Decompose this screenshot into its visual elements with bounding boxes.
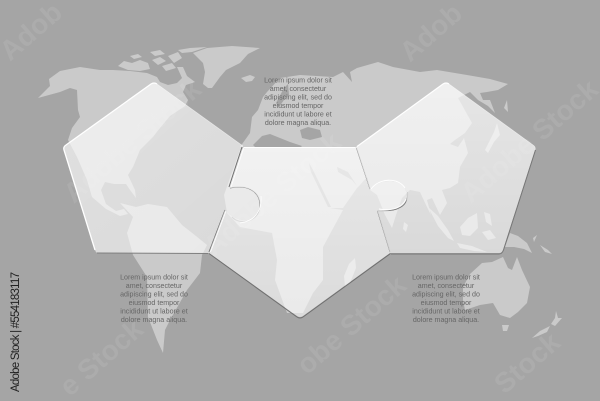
text block: bottom right (412, 274, 480, 324)
text block: top: amet, consectetur (270, 85, 327, 93)
australia (463, 257, 530, 318)
text block: bottom right: eiusmod tempor (421, 299, 472, 307)
puzzle piece: centre pentagon (209, 147, 408, 318)
south america (120, 203, 207, 357)
southeast asia islands (403, 207, 496, 252)
text block: top (264, 76, 332, 127)
text block: bottom right: dolore magna aliqua. (413, 316, 479, 324)
text block: bottom right: Lorem ipsum dolor sit (412, 274, 480, 282)
text block: bottom left: eiusmod tempor (129, 299, 180, 307)
watermark: Adobe Stock (454, 73, 600, 209)
watermark: e Stock (53, 313, 149, 401)
text block: bottom left: amet, consectetur (126, 282, 183, 290)
text block: bottom left: dolore magna aliqua. (121, 316, 187, 324)
puzzle piece: right pentagon (356, 83, 536, 254)
text block: bottom left: incididunt ut labore et (120, 308, 188, 316)
madagascar (344, 258, 356, 287)
text block: top: incididunt ut labore et (264, 110, 332, 118)
japan and sakhalin (485, 100, 508, 153)
text block: bottom right: incididunt ut labore et (412, 308, 480, 316)
africa (224, 143, 343, 313)
world map (38, 46, 562, 357)
tasmania (502, 325, 509, 331)
watermark: Adobe Stock (57, 73, 207, 209)
text block: top: adipiscing elit, sed do (264, 94, 332, 102)
watermark: obe Stock (291, 269, 412, 380)
seas (253, 84, 357, 207)
puzzle piece: left pentagon (64, 83, 261, 254)
iceland (241, 75, 255, 82)
greenland (193, 46, 260, 88)
new zealand (532, 311, 562, 338)
eurasia (240, 62, 508, 228)
new guinea (505, 233, 552, 254)
text block: bottom left: adipiscing elit, sed do (120, 290, 188, 298)
text block: top: Lorem ipsum dolor sit (264, 76, 332, 84)
watermark: Stock (488, 326, 566, 400)
north america (38, 67, 195, 216)
text block: bottom right: amet, consectetur (418, 282, 475, 290)
watermark: Adobe Stock (197, 126, 347, 262)
text block: top: eiusmod tempor (273, 102, 324, 110)
text block: bottom left (120, 274, 188, 324)
text block: bottom right: adipiscing elit, sed do (412, 290, 480, 298)
arctic islands (118, 47, 207, 71)
text block: bottom left: Lorem ipsum dolor sit (120, 274, 188, 282)
text block: top: dolore magna aliqua. (265, 119, 331, 127)
stock id label: Adobe Stock | #554183117 (10, 272, 22, 392)
